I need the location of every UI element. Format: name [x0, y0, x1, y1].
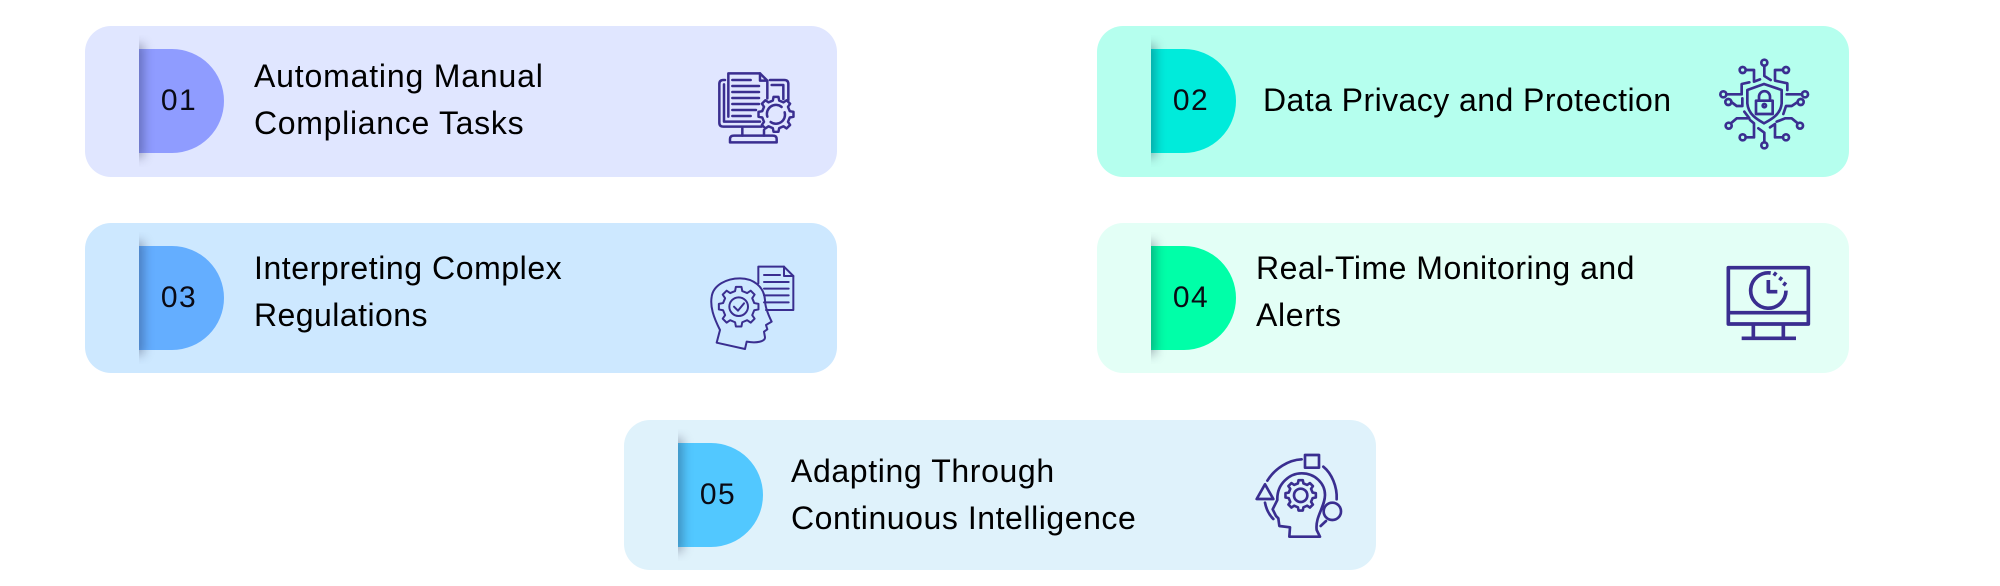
icon: monitor with document and gear	[718, 72, 795, 144]
number tab 02	[1151, 49, 1236, 153]
heading 04: Alerts	[1256, 297, 1342, 333]
panel: 01 automating manual compliance tasks	[85, 26, 837, 177]
number tab 04	[1151, 246, 1236, 350]
heading 03: Interpreting Complex	[254, 250, 562, 286]
number tab 03	[139, 246, 224, 350]
heading 03: Regulations	[254, 297, 428, 333]
heading 05: Continuous Intelligence	[791, 500, 1136, 536]
icon: shield with lock and circuits	[1719, 58, 1810, 150]
number tab 05	[678, 443, 763, 547]
panel: 02 data privacy and protection	[1097, 26, 1849, 177]
tab shadow 01	[139, 39, 150, 163]
heading 03	[254, 250, 562, 333]
heading 02: Data Privacy and Protection	[1263, 82, 1672, 118]
tab shadow 03	[139, 236, 150, 360]
tab shadow 05	[678, 433, 688, 557]
panel: 04 real-time monitoring and alerts	[1097, 223, 1849, 373]
number 01: 01	[161, 84, 197, 117]
number 04: 04	[1173, 281, 1209, 314]
tab shadow 02	[1151, 39, 1162, 163]
icon: head with gear and shapes	[1255, 454, 1342, 538]
number 03: 03	[161, 281, 197, 314]
tab shadow 04	[1151, 236, 1162, 360]
number tab 01	[139, 49, 224, 153]
panel: 03 interpreting complex regulations	[85, 223, 837, 373]
panel: 05 adapting through continuous intelligence	[624, 420, 1376, 570]
heading 05	[791, 453, 1136, 536]
icon: head with gear and document	[710, 266, 794, 350]
heading 01: Compliance Tasks	[254, 105, 524, 141]
icon: monitor with clock	[1726, 266, 1810, 340]
heading 01	[254, 58, 544, 141]
heading 04: Real-Time Monitoring and	[1256, 250, 1635, 286]
heading 01: Automating Manual	[254, 58, 544, 94]
heading 05: Adapting Through	[791, 453, 1055, 489]
number 02: 02	[1173, 84, 1209, 117]
number 05: 05	[700, 478, 736, 511]
heading 04	[1256, 250, 1635, 333]
